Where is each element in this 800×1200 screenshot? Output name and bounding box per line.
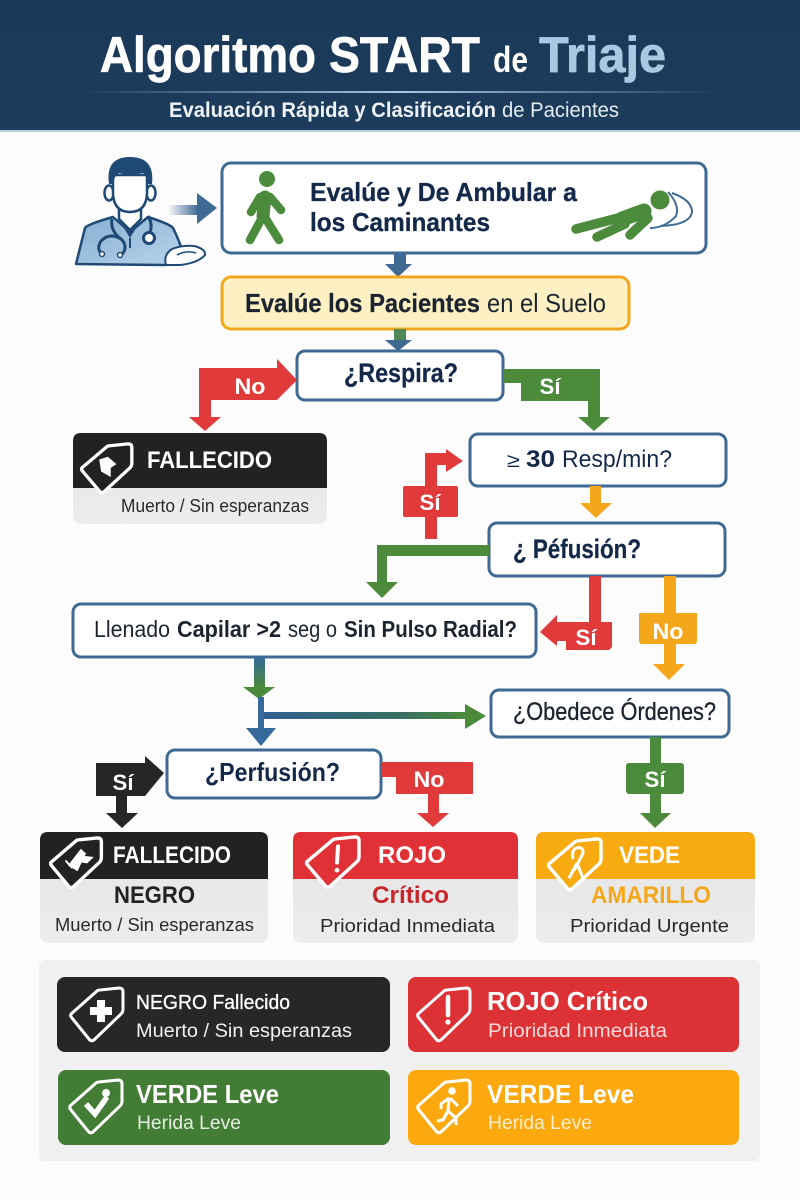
card: red outcome: Prioridad Inmediata bbox=[320, 915, 496, 936]
subtitle: de Pacientes bbox=[502, 99, 619, 122]
arrow: rate to perfusion bbox=[580, 486, 612, 518]
arrow: Sí to capillary refill bbox=[540, 576, 612, 650]
decision: breathing: ¿Respira? bbox=[344, 358, 458, 388]
icon: yellow tag bbox=[549, 839, 601, 890]
arrow: No to deceased: No bbox=[234, 374, 266, 399]
icon: black tag bbox=[51, 838, 101, 888]
title: START bbox=[329, 27, 480, 83]
legend item: amber: Herida Leve bbox=[488, 1113, 592, 1134]
decision: breathing bbox=[297, 351, 503, 400]
arrow: Sí red loop to rate bbox=[403, 449, 463, 539]
legend item: red: ROJO Crítico bbox=[487, 986, 648, 1016]
legend item: red bbox=[408, 977, 739, 1052]
card: black outcome: FALLECIDO bbox=[113, 842, 231, 869]
arrow: Sí to respiratory rate bbox=[503, 369, 610, 431]
legend item: green: Herida Leve bbox=[137, 1113, 241, 1134]
arrow: Sí to capillary refill: Sí bbox=[576, 625, 597, 650]
panel: assess ground patients: en el Suelo bbox=[487, 288, 606, 318]
arrow: to breathing question bbox=[385, 329, 412, 351]
arrow: doctor to first step bbox=[168, 193, 217, 224]
decision: capillary refill: Capilar >2 bbox=[177, 616, 281, 642]
arrow: perfusion to capillary refill bbox=[366, 545, 489, 598]
decision: obeys commands bbox=[491, 690, 729, 737]
icon: doctor with stethoscope bbox=[76, 157, 205, 265]
legend item: red: Prioridad Inmediata bbox=[488, 1021, 667, 1042]
decision: second perfusion: ¿Perfusión? bbox=[205, 757, 340, 787]
arrow: Sí to yellow: Sí bbox=[644, 767, 666, 792]
panel: assess ground patients bbox=[222, 277, 629, 329]
decision: capillary refill: Llenado bbox=[94, 616, 170, 642]
card: red outcome: Crítico bbox=[372, 882, 449, 909]
panel: assess walking patients bbox=[222, 163, 706, 253]
panel: deceased outcome: Muerto / Sin esperanzas bbox=[121, 496, 309, 516]
icon: walking person bbox=[250, 171, 281, 240]
subtitle: Evaluación Rápida y Clasificación bbox=[169, 99, 496, 122]
text: step one bbox=[310, 177, 578, 237]
card: red outcome bbox=[293, 832, 518, 943]
arrow: refill down bbox=[243, 657, 275, 699]
text: step one: Evalúe y De Ambular a bbox=[310, 177, 578, 207]
arrow: Sí to black bbox=[96, 756, 164, 828]
decision: capillary refill: Sin Pulso Radial? bbox=[344, 616, 517, 642]
title: de bbox=[493, 39, 528, 80]
card: yellow outcome: VEDE bbox=[619, 842, 680, 869]
panel: deceased outcome: FALLECIDO bbox=[147, 447, 272, 474]
decision: obeys commands: ¿Obedece Órdenes? bbox=[513, 697, 716, 726]
decision: respiratory rate: 30 bbox=[526, 446, 555, 473]
arrow: Sí to black: Sí bbox=[112, 770, 134, 795]
arrow: No to commands: No bbox=[652, 619, 684, 644]
legend item: black: NEGRO Fallecido bbox=[136, 992, 290, 1014]
decision: respiratory rate: Resp/min? bbox=[562, 446, 672, 473]
icon: deceased tag bbox=[82, 444, 132, 492]
card: red outcome: ROJO bbox=[378, 842, 446, 869]
arrow: No to red bbox=[381, 762, 473, 827]
legend item: black: Muerto / Sin esperanzas bbox=[136, 1021, 352, 1042]
arrow: Sí to respiratory rate: Sí bbox=[540, 374, 561, 399]
arrow: No to red: No bbox=[414, 767, 444, 792]
title: Algoritmo bbox=[100, 27, 316, 83]
decision: perfusion bbox=[489, 523, 725, 576]
title: Triaje bbox=[539, 27, 666, 83]
header band bbox=[0, 0, 800, 132]
decision: respiratory rate: ≥ bbox=[507, 450, 520, 472]
arrow: No to deceased bbox=[189, 359, 297, 431]
icon: person lying down bbox=[576, 190, 692, 237]
card: black outcome: NEGRO bbox=[114, 882, 195, 909]
card: yellow outcome bbox=[536, 832, 755, 943]
decision: capillary refill bbox=[73, 604, 536, 657]
panel: deceased outcome bbox=[73, 433, 327, 524]
arrow: to commands bbox=[264, 704, 486, 729]
legend item: amber bbox=[408, 1070, 739, 1145]
icon: red tag bbox=[307, 837, 359, 887]
arrow: No to commands bbox=[639, 576, 697, 680]
card: black outcome bbox=[40, 832, 268, 943]
panel: assess ground patients: Evalúe los Pacientes bbox=[245, 288, 480, 318]
legend item: green bbox=[58, 1070, 390, 1145]
card: yellow outcome: Prioridad Urgente bbox=[570, 915, 729, 936]
legend item: amber: VERDE Leve bbox=[487, 1079, 634, 1109]
legend item: green: VERDE Leve bbox=[136, 1079, 279, 1109]
decision: respiratory rate bbox=[470, 434, 726, 486]
arrow: to ground patients bbox=[385, 253, 412, 277]
arrow: Sí red loop to rate: Sí bbox=[420, 490, 441, 515]
card: yellow outcome: AMARILLO bbox=[591, 882, 711, 909]
legend item: black bbox=[57, 977, 390, 1052]
decision: perfusion: ¿ Péfusión? bbox=[513, 534, 641, 564]
decision: second perfusion bbox=[167, 750, 381, 798]
panel: legend bbox=[39, 960, 760, 1161]
arrow: down to second perfusion bbox=[246, 697, 276, 746]
arrow: Sí to yellow bbox=[626, 737, 684, 828]
card: black outcome: Muerto / Sin esperanzas bbox=[55, 914, 254, 935]
decision: capillary refill: seg o bbox=[288, 616, 337, 642]
text: step one: los Caminantes bbox=[310, 207, 490, 237]
title bbox=[100, 27, 666, 83]
